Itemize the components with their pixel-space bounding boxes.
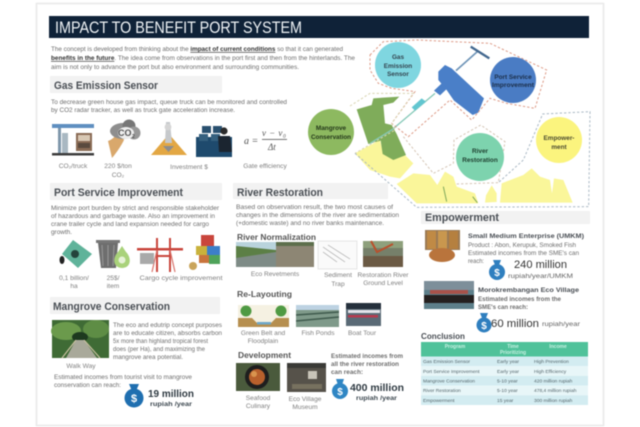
diagram: sediment trap: [318, 241, 357, 269]
mangrove income text: [54, 374, 192, 389]
re-layouting labels: [241, 330, 377, 345]
dashed boundary west: [350, 93, 413, 153]
value: 19 million: [148, 388, 194, 408]
title: [49, 16, 589, 38]
map marker: empowerment: ment: [551, 144, 567, 151]
table row: gas emission sensor: Gas Emission Sensor: [423, 359, 470, 365]
icon: hazardous waste mat: [60, 240, 92, 268]
map marker: gas emission sensor: Sensor: [387, 71, 409, 78]
subheading: re-layouting: Re-Layouting: [237, 290, 292, 299]
river normalization labels: Ground Level: [363, 280, 403, 287]
table row: gas emission sensor: [421, 356, 588, 366]
map marker: empowerment: [536, 117, 582, 163]
eco village text: Morokrembangan Eco Village: [478, 287, 579, 294]
value: 19 million: 19 million: [148, 388, 194, 400]
table row: port service improvement: High Efficiency: [534, 369, 567, 375]
map marker: river restoration: River: [472, 148, 488, 155]
table header: Prioritizing: [500, 350, 526, 356]
river restoration description: (+domestic waste) and no river banks maintenance.: [236, 220, 384, 227]
gas emission description: by CO2 radar tracker, as well as truck gate acceleration increase.: [51, 107, 235, 114]
development labels: Museum: [292, 404, 318, 411]
gas emission description: [51, 99, 287, 114]
heading: gas emission sensor: [50, 76, 222, 93]
access channel: [370, 93, 435, 143]
port service icon labels: ha: [70, 283, 78, 290]
table row: mangrove conservation: 5-10 year: [497, 378, 518, 384]
port service description: crane trailer cycle and land expansion needed for cargo: [51, 221, 209, 228]
photo: eco village museum: [287, 363, 326, 392]
icon: money bag: [489, 260, 505, 280]
UMKM text: Small Medium Enterprise (UMKM): [468, 233, 584, 240]
icon: CO2 cloud: [108, 120, 140, 158]
heading: mangrove conservation: [50, 297, 220, 314]
gas emission icon labels: [59, 163, 287, 179]
map marker: port service improvement: [490, 57, 536, 103]
icon: money bag: $: [337, 387, 343, 398]
gas emission icon labels: Investment $: [170, 164, 208, 171]
mangrove description: [113, 322, 222, 361]
UMKM text: Product : Abon, Kerupuk, Smoked Fish: [468, 242, 576, 249]
green mangrove land: [357, 97, 406, 160]
mangrove description: does (per Ha), and maximizing the: [113, 346, 205, 353]
river restoration income text: Estimated incomes from: [331, 353, 403, 360]
intro text: [51, 46, 355, 71]
subheading: river normalization: River Normalization: [237, 233, 316, 242]
icon: crane and trailer: [137, 238, 183, 272]
river restoration description: [236, 204, 399, 227]
heading: river restoration: River Restoration: [237, 187, 323, 199]
illustration: green belt and floodplain: [238, 305, 289, 327]
map marker: empowerment: Empower-: [544, 135, 574, 142]
intro text: benefits in the future. The idea come from observations in the port first and then from the hinterlands. The: [51, 55, 355, 62]
gate efficiency formula: Δt: [267, 142, 276, 152]
gas emission icon labels: Gate efficiency: [243, 163, 287, 170]
value: 60 million: 60 million: [491, 318, 539, 330]
table row: gas emission sensor: Early year: [497, 359, 519, 365]
value: 60 million: [491, 318, 580, 330]
mangrove description: are to educate citizen, absorbs carbon: [113, 330, 222, 337]
UMKM text: reach:: [468, 258, 484, 265]
table row: empowerment: Empowerment: [423, 398, 455, 404]
eco village text: SME's can reach:: [478, 304, 528, 311]
map marker: gas emission sensor: [375, 42, 421, 88]
table row: port service improvement: Port Service Improvement: [423, 369, 480, 375]
development labels: Eco Village: [289, 396, 322, 403]
icon: money bag: [332, 379, 348, 399]
river restoration income text: can reach:: [331, 369, 363, 376]
table row: mangrove conservation: [421, 376, 588, 386]
icon: CO2 cloud: 2: [132, 134, 135, 140]
gate efficiency formula: v − v₀: [262, 128, 286, 138]
green creeks: [443, 187, 477, 203]
table row: river restoration: 5-10 year: [497, 388, 518, 394]
map marker: mangrove conservation: Conservation: [311, 134, 351, 141]
port service icon labels: Cargo cycle improvement: [140, 275, 223, 282]
value: 400 million: rupiah /year: [356, 395, 398, 402]
map marker: river restoration: [456, 133, 504, 181]
gate efficiency formula: [244, 128, 287, 152]
yellow land middle: [397, 172, 478, 203]
title: IMPACT TO BENEFIT PORT SYSTEM: [55, 19, 302, 37]
table row: river restoration: River Restoration: [423, 388, 461, 394]
value: 60 million: rupiah/year: [542, 321, 580, 328]
development labels: Culinary: [246, 403, 271, 410]
icon: stacked containers: [189, 235, 220, 270]
gas emission icon labels: CO₂/truck: [59, 163, 88, 170]
photo: restoration river ground level: [363, 241, 403, 267]
heading: port service improvement: [50, 183, 222, 200]
map artwork: [350, 40, 590, 207]
map marker: gas emission sensor: Emission: [384, 63, 412, 70]
icon: truck at gas station: [52, 124, 94, 156]
development labels: Seafood: [246, 395, 271, 402]
re-layouting labels: Floodplain: [248, 338, 279, 345]
gas emission description: To decrease green house gas impact, queue truck can be monitored and controlled: [51, 99, 287, 106]
panel: site map: [308, 40, 590, 207]
eco village text: Estimated incomes from the: [478, 296, 561, 303]
map marker: river restoration: Restoration: [462, 157, 498, 164]
panel: river restoration: [233, 183, 409, 411]
river normalization labels: Trap: [331, 281, 345, 288]
port service icon labels: item: [107, 283, 120, 290]
blue port terminal: [438, 65, 484, 115]
photo: UMKM products: [425, 230, 460, 262]
walk way label: Walk Way: [66, 363, 96, 370]
map marker: mangrove conservation: [308, 109, 354, 155]
table row: mangrove conservation: 420 million rupiah: [534, 378, 573, 384]
port service icon labels: [59, 275, 223, 290]
heading: conclusion: Conclusion: [421, 331, 465, 341]
eco village text: [478, 287, 579, 311]
table header: Program: [445, 344, 466, 350]
value: 400 million: 400 million: [350, 382, 404, 394]
heading: port service improvement: Port Service Improvement: [54, 187, 183, 199]
re-layouting labels: Green Belt and: [241, 330, 286, 337]
heading: empowerment: Empowerment: [425, 212, 499, 224]
river normalization labels: [251, 271, 409, 288]
jetty head: [471, 47, 489, 58]
conclusion table: [421, 342, 588, 405]
yellow land east: [500, 168, 573, 203]
icon: money bag: [124, 384, 144, 408]
table row: mangrove conservation: Mangrove Conservation: [423, 378, 475, 384]
dashed boundary river: [403, 125, 505, 184]
river restoration income text: [331, 353, 403, 376]
table row: empowerment: 300 million rupiah: [534, 398, 573, 404]
photo: fish ponds: [296, 305, 339, 327]
heading: empowerment: [421, 211, 590, 224]
port service description: growth.: [51, 229, 72, 236]
UMKM text: [468, 233, 584, 265]
heading: mangrove conservation: Mangrove Conservation: [53, 301, 170, 313]
panel: port service improvement: [50, 183, 223, 290]
dashed boundary north: [370, 40, 547, 137]
table header: Time: [507, 344, 519, 350]
yellow land islet: [485, 185, 497, 203]
value: 240 million: 240 million: [514, 259, 567, 271]
panel: gas emission sensor: [50, 76, 287, 179]
re-layouting labels: Fish Ponds: [302, 330, 335, 337]
river restoration description: changes in the dimensions of the river are sedimentation: [236, 212, 399, 219]
re-layouting labels: Boat Tour: [348, 330, 377, 337]
river normalization labels: Eco Revetments: [251, 271, 300, 278]
table header: [421, 342, 588, 356]
panel: empowerment: [421, 211, 590, 332]
value: 240 million: [508, 259, 573, 280]
subheading: development: Development: [238, 351, 291, 360]
development labels: [246, 395, 322, 411]
table row: port service improvement: [421, 366, 588, 376]
icon: money bag: $: [481, 321, 487, 332]
table row: gas emission sensor: High Prevention: [534, 359, 569, 365]
map marker: port service improvement: Improvement: [492, 82, 535, 89]
photo: eco revetments: [236, 242, 314, 267]
mangrove description: The eco and edutrip concept purposes: [113, 322, 222, 329]
icon: money bag: $: [494, 268, 500, 279]
gas emission icon labels: CO₂: [112, 172, 125, 179]
value: 240 million: rupiah/year/UMKM: [508, 273, 573, 280]
icon: investment plant: [151, 122, 187, 155]
map marker: gas emission sensor: Gas: [392, 54, 404, 61]
port service description: [51, 205, 220, 236]
UMKM text: Estimated incomes from the SME's can: [468, 250, 579, 257]
table row: empowerment: [421, 395, 588, 405]
river restoration description: Based on observation result, the two most causes of: [236, 204, 393, 211]
mangrove income text: conservation can reach:: [54, 382, 121, 389]
icon: trash bin and recycling bag: [96, 240, 130, 268]
river restoration income text: all the river restoration: [331, 361, 399, 368]
value: 400 million: [350, 382, 404, 402]
yellow land west: [355, 140, 413, 178]
heading: gas emission sensor: Gas Emission Sensor: [54, 80, 159, 92]
gate efficiency formula: a =: [244, 136, 258, 147]
intro text: The concept is developed from thinking about the impact of current conditions so that it can generated: [51, 46, 343, 53]
table row: river restoration: [421, 386, 588, 395]
mangrove income text: Estimated incomes from tourist visit to mangrove: [54, 374, 192, 381]
mangrove description: mangrove area potential.: [113, 354, 183, 361]
photo: mangrove walk way: [51, 320, 109, 358]
photo: boat tour: [346, 303, 381, 326]
intro text: aim is not only to advance the port but also environment and surrounding communities.: [51, 64, 299, 71]
mangrove description: 5x more than highland tropical forest: [113, 338, 208, 345]
port service icon labels: 25$/: [107, 275, 120, 282]
panel: mangrove conservation: [50, 297, 222, 408]
photo: seafood culinary: [236, 363, 280, 391]
icon: money bag: $: [131, 393, 137, 405]
map marker: mangrove conservation: Mangrove: [316, 125, 347, 132]
table row: port service improvement: Early year: [497, 369, 519, 375]
icon: money bag: [476, 313, 492, 332]
port service description: of hazardous and garbage waste. Also an improvement in: [51, 213, 215, 220]
photo: Morokrembangan eco village: [424, 281, 474, 309]
heading: river restoration: [233, 183, 388, 199]
port service description: Minimize port burden by strict and responsible stakeholder: [51, 205, 220, 212]
gas emission icon labels: 220 $/ton: [104, 163, 132, 170]
icon: CO2 cloud: CO: [118, 128, 132, 138]
value: 19 million: rupiah /year: [150, 401, 193, 408]
icon: operator at control desk: [196, 125, 232, 157]
table row: empowerment: 15 year: [497, 398, 514, 404]
river normalization labels: Sediment: [324, 272, 352, 279]
table row: river restoration: 478,4 million rupiah: [534, 388, 577, 394]
teal dock: [412, 98, 426, 111]
jetty: [456, 52, 477, 71]
dashed boundary south: [355, 112, 590, 207]
panel: conclusion: [421, 331, 588, 405]
port service icon labels: 0,1 billion/: [59, 275, 89, 282]
map marker: port service improvement: Port Service: [494, 74, 532, 81]
blue small basin: [434, 83, 447, 95]
river normalization labels: Restoration River: [358, 272, 409, 279]
table header: Income: [549, 344, 567, 350]
